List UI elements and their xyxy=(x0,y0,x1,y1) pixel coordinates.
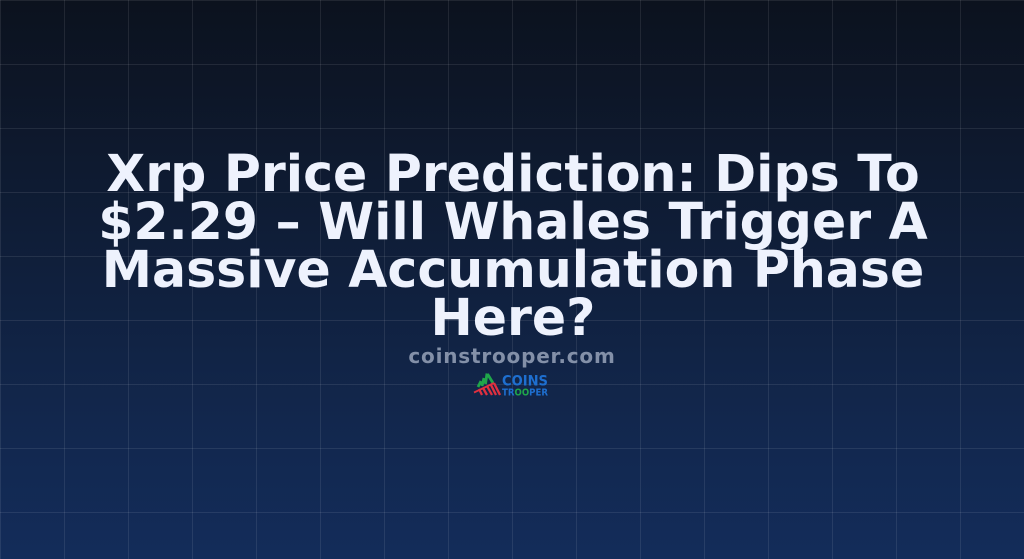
icon: green and red mountain bars xyxy=(474,374,500,395)
icon: coinstrooper logo xyxy=(474,373,548,398)
title: Here? xyxy=(431,288,595,346)
source domain text: coinstrooper.com xyxy=(408,344,616,368)
title: $2.29 – Will Whales Trigger A xyxy=(98,192,928,250)
title xyxy=(98,144,928,346)
title: Xrp Price Prediction: Dips To xyxy=(106,144,920,202)
title: Massive Accumulation Phase xyxy=(102,240,924,298)
